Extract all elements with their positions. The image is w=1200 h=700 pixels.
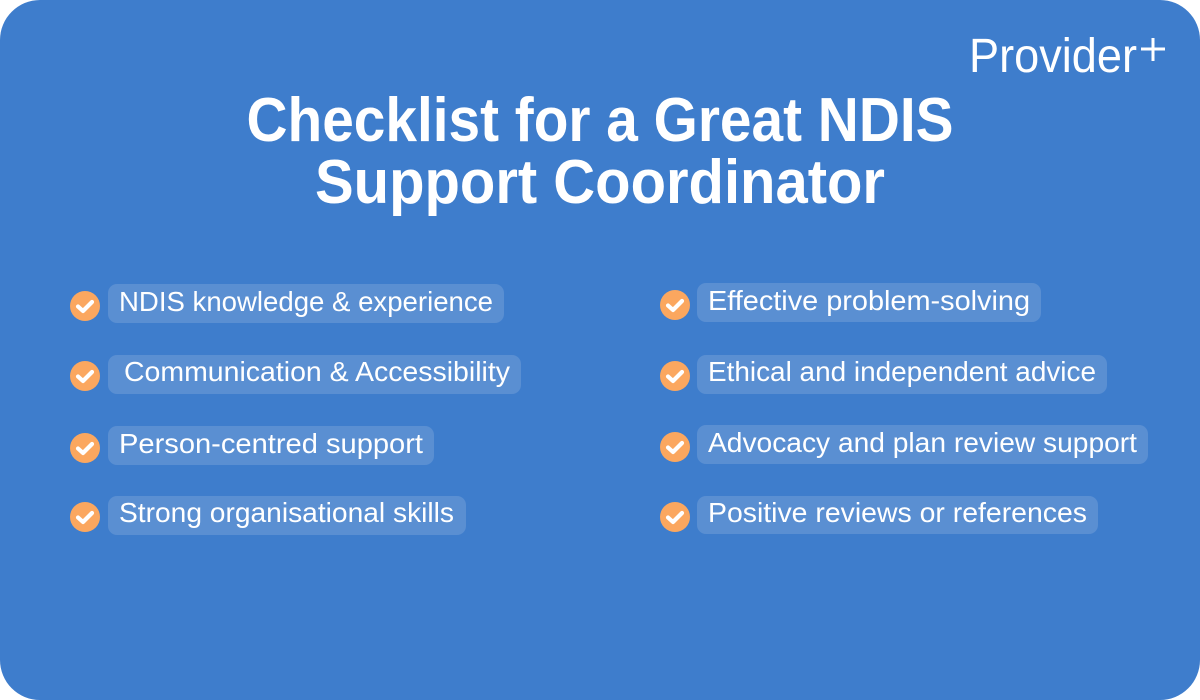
item: Person-centred support [70,426,434,465]
item: Effective problem-solving [660,283,1041,322]
title [246,86,954,217]
title: Support Coordinator [315,148,885,217]
item: Strong organisational skills [70,496,466,535]
item: Ethical and independent advice: Ethical and independent advice [708,356,1096,387]
item: Strong organisational skills: Strong organisational skills [119,497,454,528]
item: Effective problem-solving: Effective problem-solving [708,285,1030,316]
checklist: right column [660,283,1148,534]
item: Communication & Accessibility: Communication & Accessibility [124,356,510,387]
item: NDIS knowledge & experience [70,284,504,323]
item: Person-centred support: Person-centred support [119,428,423,459]
item: NDIS knowledge & experience: NDIS knowledge & experience [119,286,493,317]
item: Advocacy and plan review support: Advocacy and plan review support [708,427,1137,458]
item: Positive reviews or references [660,496,1098,534]
item: Communication & Accessibility [70,355,521,394]
item: Ethical and independent advice [660,355,1107,394]
title: Checklist for a Great NDIS [246,86,954,155]
item: Positive reviews or references: Positive reviews or references [708,497,1087,528]
item: Advocacy and plan review support [660,425,1148,464]
logo: Provider+: Provider [969,30,1137,83]
checklist: left column [70,284,521,535]
